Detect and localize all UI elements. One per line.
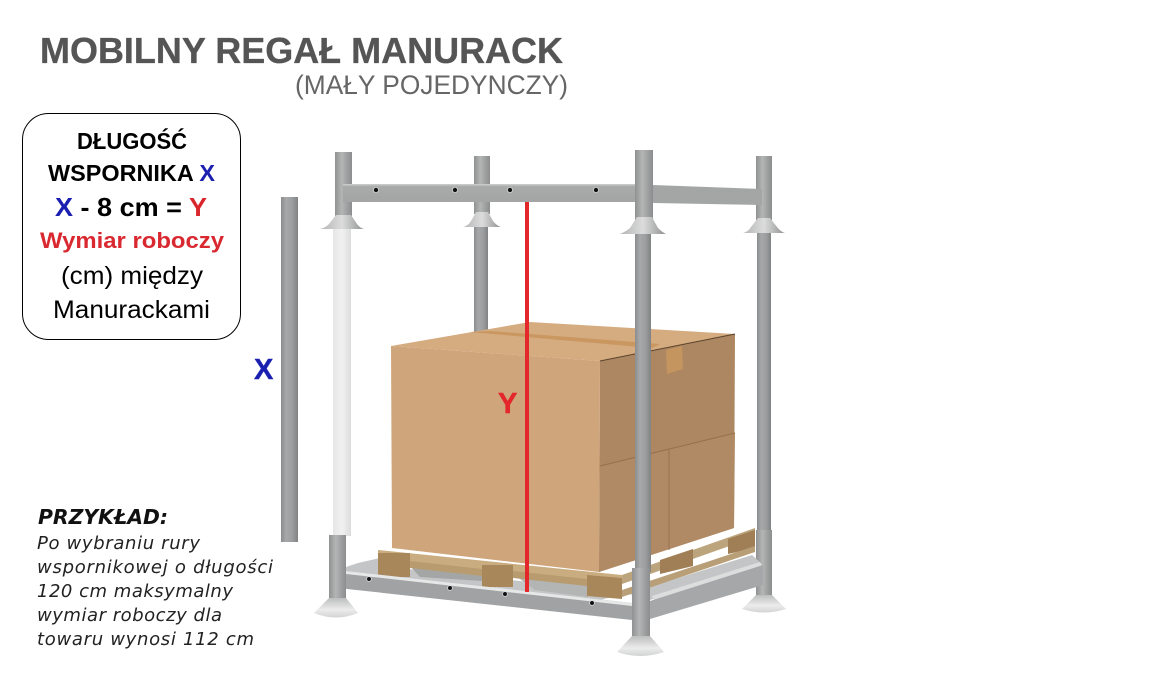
label Y: Y xyxy=(498,388,517,420)
example text block xyxy=(37,505,273,650)
lower frame deck xyxy=(337,555,763,600)
lower front beam xyxy=(337,570,632,620)
back right post xyxy=(742,156,786,612)
back left post xyxy=(463,156,501,336)
callout line: wspornika x: WSPORNIKA X xyxy=(48,160,216,186)
upper left beam xyxy=(343,184,635,202)
panel: formula callout xyxy=(22,114,240,340)
rack with box illustration xyxy=(314,150,786,656)
box top face xyxy=(391,322,735,361)
front left post xyxy=(314,152,364,618)
example line 4: wymiar roboczy dla xyxy=(37,605,222,626)
example line 5: towaru wynosi 112 cm xyxy=(37,629,254,650)
box side face xyxy=(599,334,735,572)
loose support pipe X xyxy=(281,197,298,542)
example line 1: Po wybraniu rury xyxy=(37,533,200,554)
red dimension line Y xyxy=(525,202,529,592)
front right post xyxy=(617,150,666,656)
callout line: manurackami: Manurackami xyxy=(53,296,210,324)
callout line: cm między: (cm) między xyxy=(61,262,204,290)
beam holes xyxy=(367,577,594,605)
upper right beam xyxy=(653,185,762,205)
box lower side panel xyxy=(599,433,735,572)
example line 2: wspornikowej o długości xyxy=(37,557,273,578)
upper beam holes xyxy=(373,187,599,193)
box seams xyxy=(600,433,735,550)
subtitle: (MAŁY POJEDYNCZY) xyxy=(295,70,568,100)
callout line: equation: X - 8 cm = Y xyxy=(55,192,207,222)
example line 3: 120 cm maksymalny xyxy=(37,581,233,602)
lower right beam xyxy=(650,565,763,619)
callout line: wymiar roboczy: Wymiar roboczy xyxy=(40,228,225,253)
label X: X xyxy=(254,354,274,386)
box front face xyxy=(391,346,600,572)
pallet xyxy=(378,528,755,599)
example heading: PRZYKŁAD: xyxy=(38,505,168,529)
title: MOBILNY REGAŁ MANURACK xyxy=(40,30,563,71)
box tape xyxy=(470,331,660,348)
callout line: długość: DŁUGOŚĆ xyxy=(77,127,187,154)
